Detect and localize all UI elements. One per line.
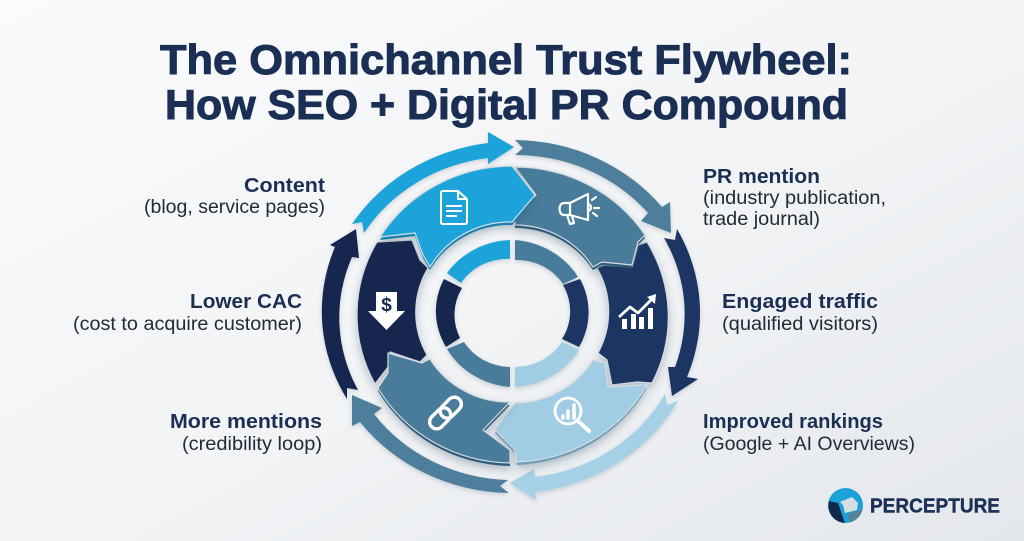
label: content: (blog, service pages) (144, 197, 325, 218)
label: lower CAC: Lower CAC (190, 291, 302, 313)
label: PR mention (703, 166, 886, 230)
label: more mentions: (credibility loop) (182, 434, 322, 455)
arrow: lower CAC to content (322, 229, 359, 399)
label: more mentions: More mentions (170, 411, 322, 433)
icon: chain link (427, 394, 464, 432)
label: improved rankings: Improved rankings (703, 411, 883, 433)
logo: Percepture: PERCEPTURE (870, 496, 1000, 518)
title: How SEO + Digital PR Compound (165, 81, 848, 128)
segment: lower CAC (357, 240, 428, 384)
inner ring segments (436, 240, 589, 387)
segment: content (380, 166, 535, 270)
logo: Percepture (828, 488, 1000, 523)
arrow: rankings to more mentions (510, 394, 678, 500)
segment: more mentions (378, 353, 510, 466)
label: engaged traffic (722, 291, 878, 335)
icon: dollar down arrow: $ (381, 295, 392, 316)
arrow: engaged traffic to rankings (664, 229, 700, 396)
label: lower CAC: (cost to acquire customer) (73, 314, 302, 335)
label: lower CAC (73, 291, 302, 335)
label: improved rankings (703, 411, 915, 455)
title: The Omnichannel Trust Flywheel: (160, 36, 852, 83)
title (160, 36, 852, 128)
arrow: more mentions to lower CAC (352, 395, 509, 493)
label: content (144, 175, 325, 218)
segment: engaged traffic (597, 242, 668, 385)
icon: magnifier (555, 398, 589, 431)
icon: logo mark (828, 488, 863, 523)
label: content: Content (244, 175, 325, 197)
label: more mentions (170, 411, 322, 455)
label: improved rankings: (Google + AI Overviews) (703, 434, 915, 455)
label: PR mention: (industry publication, (703, 188, 886, 209)
arrow: content to PR mention (352, 132, 514, 233)
outer ring of arrows (322, 132, 700, 500)
icon: dollar down arrow (368, 292, 405, 330)
arrow: PR mention to engaged traffic (515, 140, 671, 233)
middle ring segments (357, 166, 668, 466)
icon: rising bar chart (619, 294, 656, 329)
icon: megaphone (560, 194, 599, 224)
icon: document (441, 191, 467, 224)
segment: improved rankings (495, 360, 647, 465)
label: engaged traffic: Engaged traffic (722, 291, 878, 313)
segment: PR mention (515, 167, 645, 270)
label: PR mention: trade journal) (703, 209, 820, 230)
label: engaged traffic: (qualified visitors) (722, 314, 878, 335)
label: PR mention: PR mention (703, 166, 820, 188)
